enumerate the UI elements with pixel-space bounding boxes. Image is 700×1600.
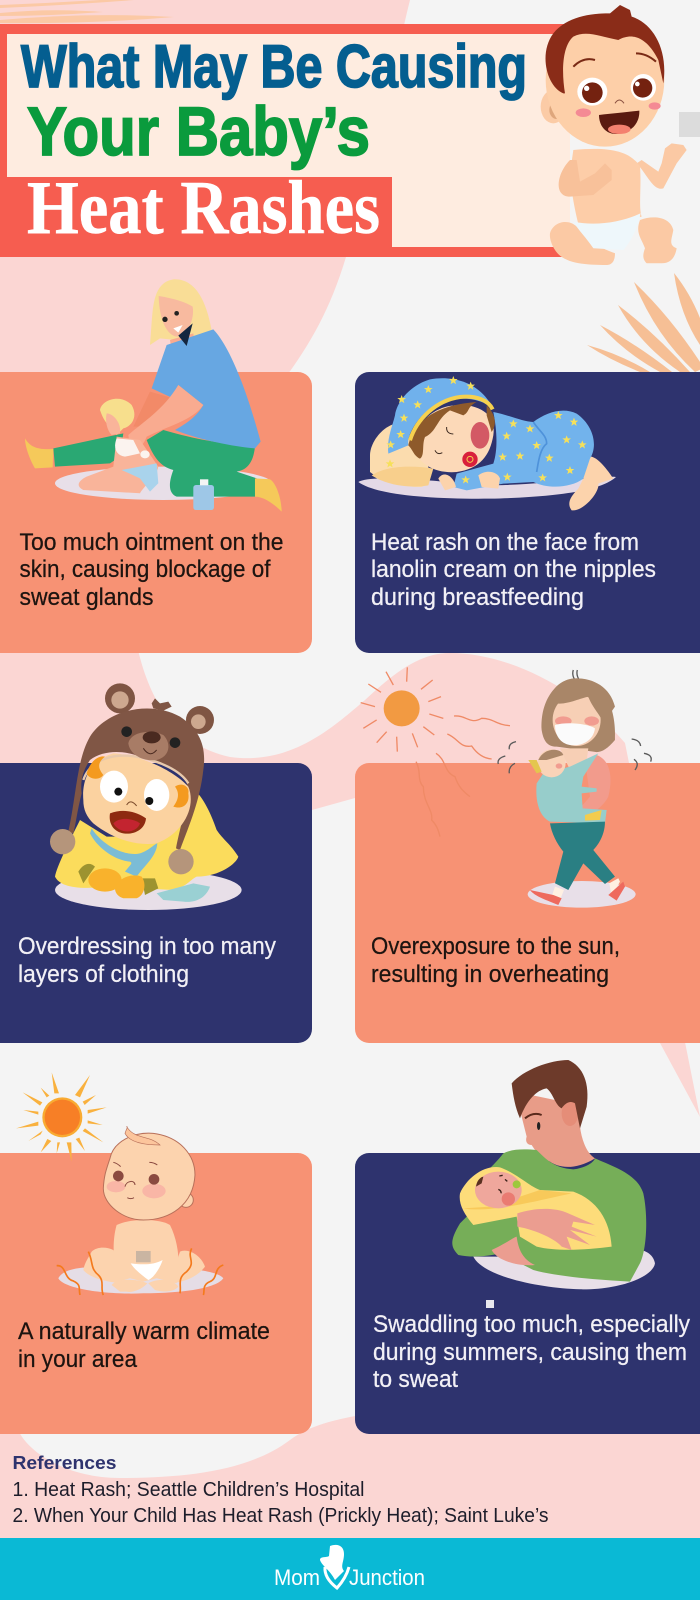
illustration: sun rays and mother carrying baby — [361, 667, 651, 908]
illustration: sun over sitting baby — [16, 1072, 223, 1295]
caption: card 2 — [371, 529, 656, 611]
caption: card 3: layers of clothing — [18, 961, 189, 988]
decorative leaves top left — [0, 0, 174, 23]
logo: MomJunction: Junction — [349, 1565, 425, 1590]
footer bar with logo — [0, 1538, 700, 1600]
references: References — [12, 1452, 117, 1473]
logo: MomJunction — [274, 1545, 425, 1590]
title line 3: Heat Rashes — [27, 166, 380, 250]
decorative leaves right — [587, 273, 700, 372]
caption: card 4: Overexposure to the sun, — [371, 933, 620, 960]
title line 2: Your Baby’s — [27, 93, 370, 170]
illustration: father holding swaddled baby — [452, 1060, 655, 1289]
references — [12, 1452, 548, 1527]
caption: card 6: during summers, causing them — [373, 1339, 687, 1366]
caption: card 2: during breastfeeding — [371, 584, 584, 611]
references: 2. When Your Child Has Heat Rash (Prickly Heat); Saint Luke’s — [12, 1505, 548, 1527]
caption: card 1 — [20, 529, 284, 611]
caption: card 5 — [18, 1318, 270, 1373]
caption: card 3 — [18, 933, 276, 988]
illustration: sleeping baby with face rash — [358, 376, 616, 510]
caption: card 3: Overdressing in too many — [18, 933, 276, 960]
references: 1. Heat Rash; Seattle Children’s Hospital — [12, 1479, 364, 1501]
caption: card 2: Heat rash on the face from — [371, 529, 639, 556]
panel: card 4 — [355, 763, 700, 1043]
caption: card 1: sweat glands — [20, 584, 154, 611]
panel: title banner — [0, 24, 570, 257]
icon: waving baby — [541, 5, 687, 265]
caption: card 1: Too much ointment on the — [20, 529, 284, 556]
caption: card 6 — [373, 1311, 690, 1393]
panel: card 3 — [0, 763, 312, 1043]
caption: card 4 — [371, 933, 620, 988]
title line 1: What May Be Causing — [21, 33, 527, 100]
panel: card 5 — [0, 1153, 312, 1434]
small white mark — [486, 1300, 494, 1308]
panel: card 6 — [355, 1153, 700, 1434]
caption: card 6: to sweat — [373, 1366, 458, 1393]
grey watermark mark — [679, 112, 700, 137]
caption: card 2: lanolin cream on the nipples — [371, 556, 656, 583]
panel: card 2 — [355, 372, 700, 653]
caption: card 5: in your area — [18, 1346, 138, 1373]
caption: card 4: resulting in overheating — [371, 961, 609, 988]
illustration: baby in bear hat — [50, 683, 242, 910]
panel: card 1 — [0, 372, 312, 653]
caption: card 1: skin, causing blockage of — [20, 556, 271, 583]
caption: card 5: A naturally warm climate — [18, 1318, 270, 1345]
caption: card 6: Swaddling too much, especially — [373, 1311, 690, 1338]
logo: MomJunction: Mom — [274, 1565, 320, 1590]
illustration: mother applying ointment — [25, 279, 282, 512]
